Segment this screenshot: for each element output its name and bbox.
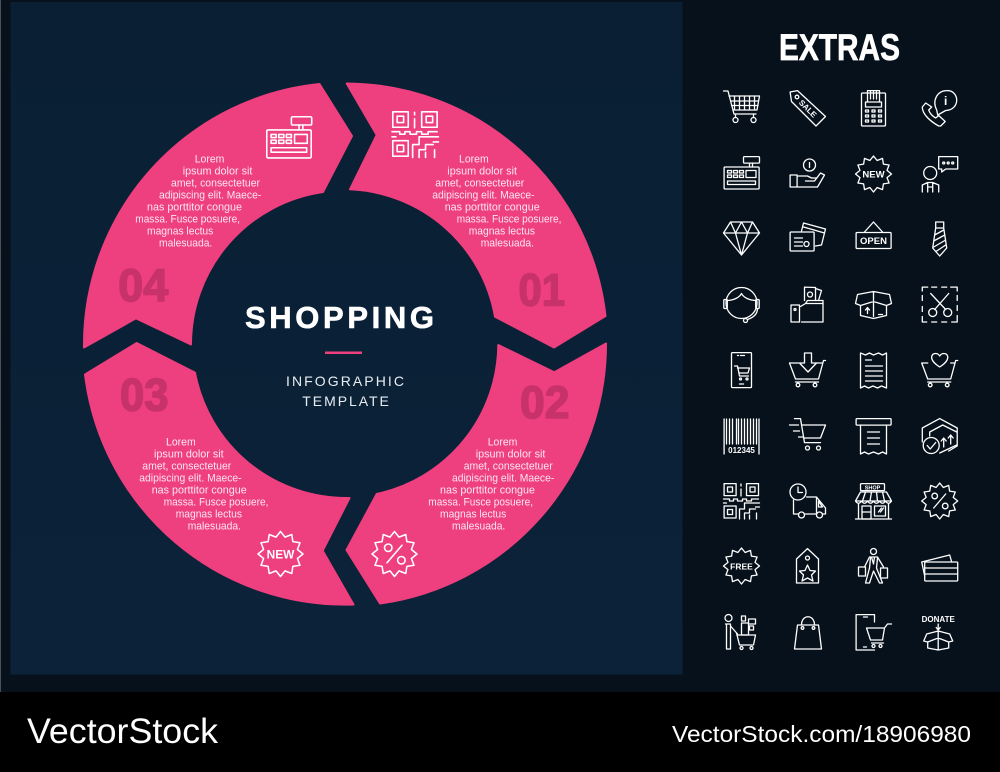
segment 04 xyxy=(84,84,352,348)
icon: stacked cards xyxy=(922,555,958,581)
icon: phone with info bubble xyxy=(922,91,957,126)
icon: NEW badge on segment 03 xyxy=(258,532,303,576)
icon: shopping cart xyxy=(724,91,760,122)
icon: shop front: SHOP xyxy=(865,485,881,491)
icon: fast cart xyxy=(790,419,826,450)
text block: segment 03: malesuada. xyxy=(188,520,241,532)
text block: segment 02: adipiscing elit. Maece- xyxy=(452,472,555,484)
text block: segment 01: Lorem xyxy=(459,154,489,166)
panel: main infographic xyxy=(10,2,682,674)
text block: segment 04: ipsum dolor sit xyxy=(183,166,253,178)
text block: segment 02: nas porttitor congue xyxy=(440,484,535,496)
icon: receipt printer xyxy=(856,419,891,454)
title: SHOPPING: SHOPPING xyxy=(245,300,434,335)
text block: segment 02: amet, consectetuer xyxy=(464,460,553,472)
icon: cash register xyxy=(724,157,760,189)
icon: support headset xyxy=(724,288,759,322)
icon: barcode: 012345 xyxy=(728,446,755,455)
accent divider xyxy=(325,352,362,354)
icon: cart with heart xyxy=(922,354,958,387)
text block: segment 03 xyxy=(139,436,268,532)
icon: phone with cart xyxy=(732,353,752,388)
icon: phone with info bubble: i xyxy=(944,94,947,108)
text block: segment 01: magnas lectus xyxy=(469,226,535,238)
icon: percent badge xyxy=(922,483,958,519)
text block: segment 04: magnas lectus xyxy=(147,226,214,238)
text block: segment 02: ipsum dolor sit xyxy=(476,448,546,460)
subtitle: TEMPLATE xyxy=(302,393,389,409)
watermark bar xyxy=(0,692,1000,772)
text block: segment 03: Lorem xyxy=(166,436,196,448)
text block: segment 03: adipiscing elit. Maece- xyxy=(139,472,242,484)
icon: hand with cash xyxy=(791,287,823,322)
text block: segment 04: malesuada. xyxy=(159,238,212,250)
icon: percent badge on segment 02 xyxy=(372,532,417,576)
icon: sale tag: SALE xyxy=(797,98,819,120)
number 03: 03 xyxy=(120,370,168,420)
text block: segment 02 xyxy=(428,436,555,532)
segment 02 xyxy=(346,344,606,604)
text block: segment 02: Lorem xyxy=(488,436,517,448)
icon: tag with star xyxy=(796,549,818,583)
text block: segment 01: amet, consectetuer xyxy=(435,178,525,190)
icon: donate box: DONATE xyxy=(922,615,955,624)
icon: new badge xyxy=(856,156,892,192)
text block: segment 04: Lorem xyxy=(195,154,224,166)
text block: segment 01 xyxy=(432,154,561,250)
icon: person with speech bubble xyxy=(922,157,958,192)
number 04: 04 xyxy=(118,260,168,311)
text block: segment 04: adipiscing elit. Maece- xyxy=(159,190,262,202)
icon: shopping bag xyxy=(794,617,822,649)
segment 03 xyxy=(85,343,354,605)
icon: hand with coin xyxy=(790,159,824,187)
text block: segment 01: adipiscing elit. Maece- xyxy=(432,190,535,202)
icon: person with loaded cart xyxy=(725,614,756,650)
subtitle xyxy=(286,373,404,409)
icon: QR code on segment 01 xyxy=(392,112,438,157)
subtitle: INFOGRAPHIC xyxy=(286,373,404,389)
text block: segment 03: nas porttitor congue xyxy=(152,484,247,496)
icon: credit cards xyxy=(790,223,826,251)
icon: NEW badge on segment 03: NEW xyxy=(267,547,295,561)
icon: open box xyxy=(856,292,892,318)
watermark: image id: VectorStock.com/18906980 xyxy=(672,721,971,747)
ring diagram xyxy=(84,84,606,605)
icon: shop front xyxy=(856,484,892,519)
text block: segment 04: nas porttitor congue xyxy=(147,202,242,214)
icon: hexagon box with check xyxy=(922,419,957,454)
text block: segment 02: malesuada. xyxy=(452,520,505,532)
watermark: VectorStock logo text: VectorStock xyxy=(27,712,219,751)
icon: necktie xyxy=(933,222,947,256)
icon: QR code xyxy=(724,484,760,519)
text block: segment 02: massa. Fusce posuere, xyxy=(428,496,533,508)
icon: open sign: OPEN xyxy=(860,236,887,247)
heading: EXTRAS: EXTRAS xyxy=(779,27,900,68)
icon: diamond xyxy=(724,222,760,255)
icon: delivery truck with clock xyxy=(790,484,826,518)
number 01: 01 xyxy=(518,264,565,316)
icon: open sign xyxy=(856,222,891,248)
icon grid: extras xyxy=(724,91,958,650)
icon: free badge: FREE xyxy=(730,562,753,572)
text block: segment 04: massa. Fusce posuere, xyxy=(135,214,240,226)
text block: segment 02: magnas lectus xyxy=(440,508,507,520)
icon: payment terminal xyxy=(862,91,886,126)
icon: barcode xyxy=(724,419,759,455)
icon: cart with download arrow xyxy=(790,353,826,387)
icon: cash register on segment 04 xyxy=(267,117,312,158)
segment 01 xyxy=(347,84,606,348)
icon: phone with shopping cart xyxy=(856,615,892,650)
text block: segment 03: ipsum dolor sit xyxy=(154,448,225,460)
icon: scissors coupon xyxy=(922,287,957,322)
text block: segment 03: magnas lectus xyxy=(176,508,242,520)
text block: segment 03: massa. Fusce posuere, xyxy=(164,496,268,508)
text block: segment 03: amet, consectetuer xyxy=(142,460,232,472)
text block: segment 01: nas porttitor congue xyxy=(445,202,540,214)
icon: free badge xyxy=(724,548,760,584)
number 02: 02 xyxy=(520,377,570,428)
text block: segment 01: ipsum dolor sit xyxy=(447,166,518,178)
text block: segment 04 xyxy=(135,154,262,250)
icon: new badge: NEW xyxy=(862,170,885,180)
text block: segment 01: malesuada. xyxy=(481,238,534,250)
icon: donate box xyxy=(922,615,955,650)
text block: segment 04: amet, consectetuer xyxy=(171,178,260,190)
icon: walking shopper xyxy=(858,548,888,583)
icon: receipt xyxy=(860,353,886,388)
text block: segment 01: massa. Fusce posuere, xyxy=(457,214,561,226)
icon: sale tag xyxy=(790,91,826,126)
